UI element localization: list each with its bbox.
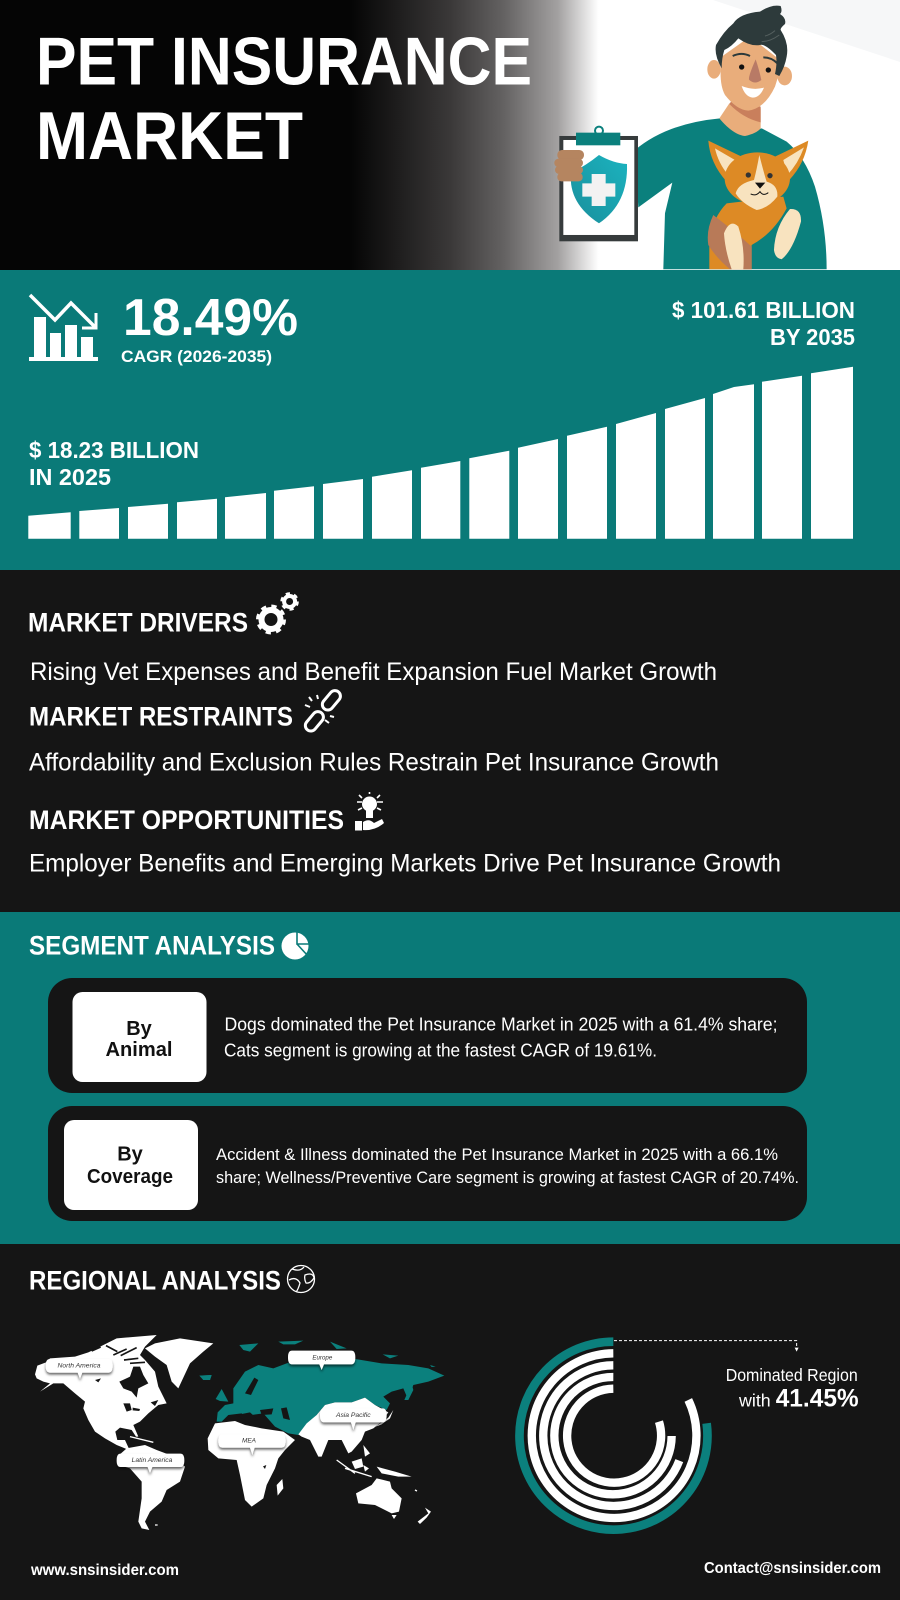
heading: market opportunities: MARKET OPPORTUNITIES (29, 805, 344, 835)
icon: pie chart (282, 931, 310, 960)
text: animal summary (224, 1014, 778, 1060)
radial chart: dominated region (519, 1341, 799, 1530)
icon: broken chain (303, 688, 343, 733)
start value: IN 2025 (29, 464, 111, 490)
heading: market restraints: MARKET RESTRAINTS (29, 702, 293, 732)
label: by animal (72, 992, 206, 1082)
title: PET INSURANCE (36, 24, 532, 100)
label: by coverage: By (117, 1144, 144, 1166)
end value (672, 297, 855, 350)
start value: $ 18.23 BILLION (29, 437, 199, 463)
callout: Asia Pacific: Asia Pacific (335, 1412, 372, 1419)
callout: Asia Pacific (320, 1408, 387, 1430)
end value: BY 2035 (770, 324, 855, 350)
label: by animal: By (126, 1018, 153, 1040)
icon: bar chart with trend arrow (29, 295, 98, 361)
person body (635, 118, 827, 269)
callout: Europe (288, 1351, 355, 1370)
text: coverage summary: Accident & Illness dominated the Pet Insurance Market in 2025 with a 66.1% (216, 1145, 778, 1164)
panel: regional analysis (0, 1244, 900, 1600)
card: by coverage (48, 1106, 807, 1221)
callout: North America: North America (57, 1363, 101, 1370)
person head (707, 6, 792, 136)
text: drivers: Rising Vet Expenses and Benefit Expansion Fuel Market Growth (30, 658, 717, 686)
world map (35, 1335, 444, 1530)
footer: contact: Contact@snsinsider.com (704, 1560, 881, 1577)
map: Eastern hemisphere (200, 1341, 444, 1524)
bar chart: growth 2025 to 2035 (28, 367, 853, 539)
callout: Europe: Europe (312, 1355, 333, 1362)
CAGR figure: 18.49% (123, 289, 298, 347)
icon: gears (258, 594, 298, 632)
start value (29, 437, 199, 490)
text: dominated region share (726, 1365, 859, 1413)
callout: Latin America: Latin America (132, 1457, 173, 1464)
text: coverage summary: share; Wellness/Preventive Care segment is growing at fastest CAGR of 20.74%. (216, 1168, 799, 1187)
callout: North America (46, 1359, 113, 1379)
text: coverage summary (216, 1145, 799, 1187)
label: by coverage (64, 1120, 198, 1210)
text: dominated region share: with (738, 1391, 771, 1411)
callout: Latin America (117, 1454, 184, 1473)
title: MARKET (36, 98, 303, 174)
end value: $ 101.61 BILLION (672, 297, 855, 323)
CAGR figure: CAGR (2026-2035) (121, 347, 272, 366)
panel: market size (0, 270, 900, 570)
icon: person with clipboard and dog (554, 6, 827, 269)
text: restraints: Affordability and Exclusion Rules Restrain Pet Insurance Growth (29, 748, 719, 776)
heading: segment analysis: SEGMENT ANALYSIS (29, 930, 275, 960)
panel: market dynamics (0, 570, 900, 912)
title (36, 24, 532, 174)
footer: website: www.snsinsider.com (30, 1562, 179, 1579)
heading: regional analysis: REGIONAL ANALYSIS (29, 1265, 281, 1295)
panel: segment analysis (0, 912, 900, 1244)
text: opportunities: Employer Benefits and Emerging Markets Drive Pet Insurance Growth (29, 850, 781, 878)
map: Americas (35, 1335, 213, 1530)
heading: market drivers: MARKET DRIVERS (28, 608, 248, 638)
icon: clipboard (554, 127, 638, 241)
arrow: dashed leader line (614, 1341, 799, 1352)
callout: MEA (218, 1434, 286, 1455)
icon: lightbulb in hand (355, 792, 384, 830)
card: by animal (48, 978, 807, 1093)
icon: corgi dog (708, 141, 808, 269)
callout: MEA: MEA (242, 1437, 256, 1444)
label: by coverage: Coverage (87, 1166, 173, 1188)
label: by animal: Animal (106, 1039, 172, 1061)
text: animal summary: Dogs dominated the Pet Insurance Market in 2025 with a 61.4% share; (224, 1014, 778, 1034)
text: dominated region share: 41.45% (776, 1385, 859, 1413)
icon: globe (288, 1266, 314, 1292)
panel: header (0, 0, 900, 270)
text: dominated region share: Dominated Region (726, 1365, 858, 1385)
text: animal summary: Cats segment is growing at the fastest CAGR of 19.61%. (224, 1040, 657, 1060)
